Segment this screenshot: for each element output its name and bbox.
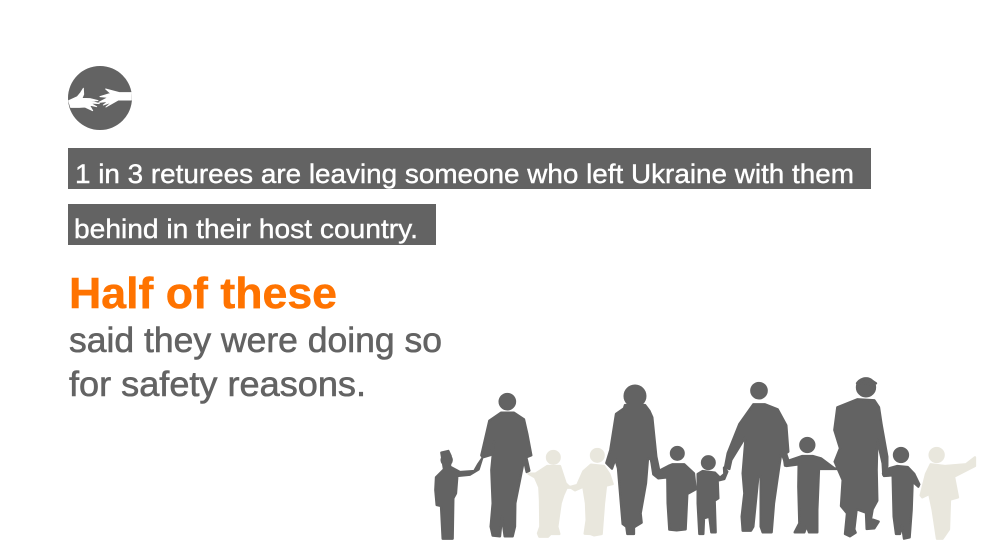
figure: child six [883, 448, 919, 539]
text bar: first line [68, 148, 871, 189]
text block: safety reasons [69, 321, 442, 404]
figure: light child seven [921, 448, 975, 539]
text block: safety reasons: said they were doing so [69, 321, 442, 360]
text bar: first line: 1 in 3 returees are leaving someone who left Ukraine with them [75, 159, 854, 189]
figure: girl [435, 451, 482, 539]
figure: light child two [570, 449, 613, 535]
figure: child five [784, 438, 837, 532]
figure: light child one [528, 451, 572, 537]
icon: helping hands [68, 66, 132, 130]
figure: woman centre [606, 386, 659, 534]
figure: child three [651, 447, 696, 530]
text bar: second line: behind in their host country. [74, 214, 418, 244]
figure: child four [698, 456, 727, 534]
figure: woman left [481, 394, 531, 536]
text block: safety reasons: for safety reasons. [69, 365, 366, 404]
illustration: family silhouettes holding hands [435, 378, 975, 539]
figure: man one [725, 383, 789, 532]
figure: man two with cap [834, 378, 887, 536]
text bar: second line [68, 204, 436, 245]
heading: half of these: Half of these [69, 269, 337, 318]
